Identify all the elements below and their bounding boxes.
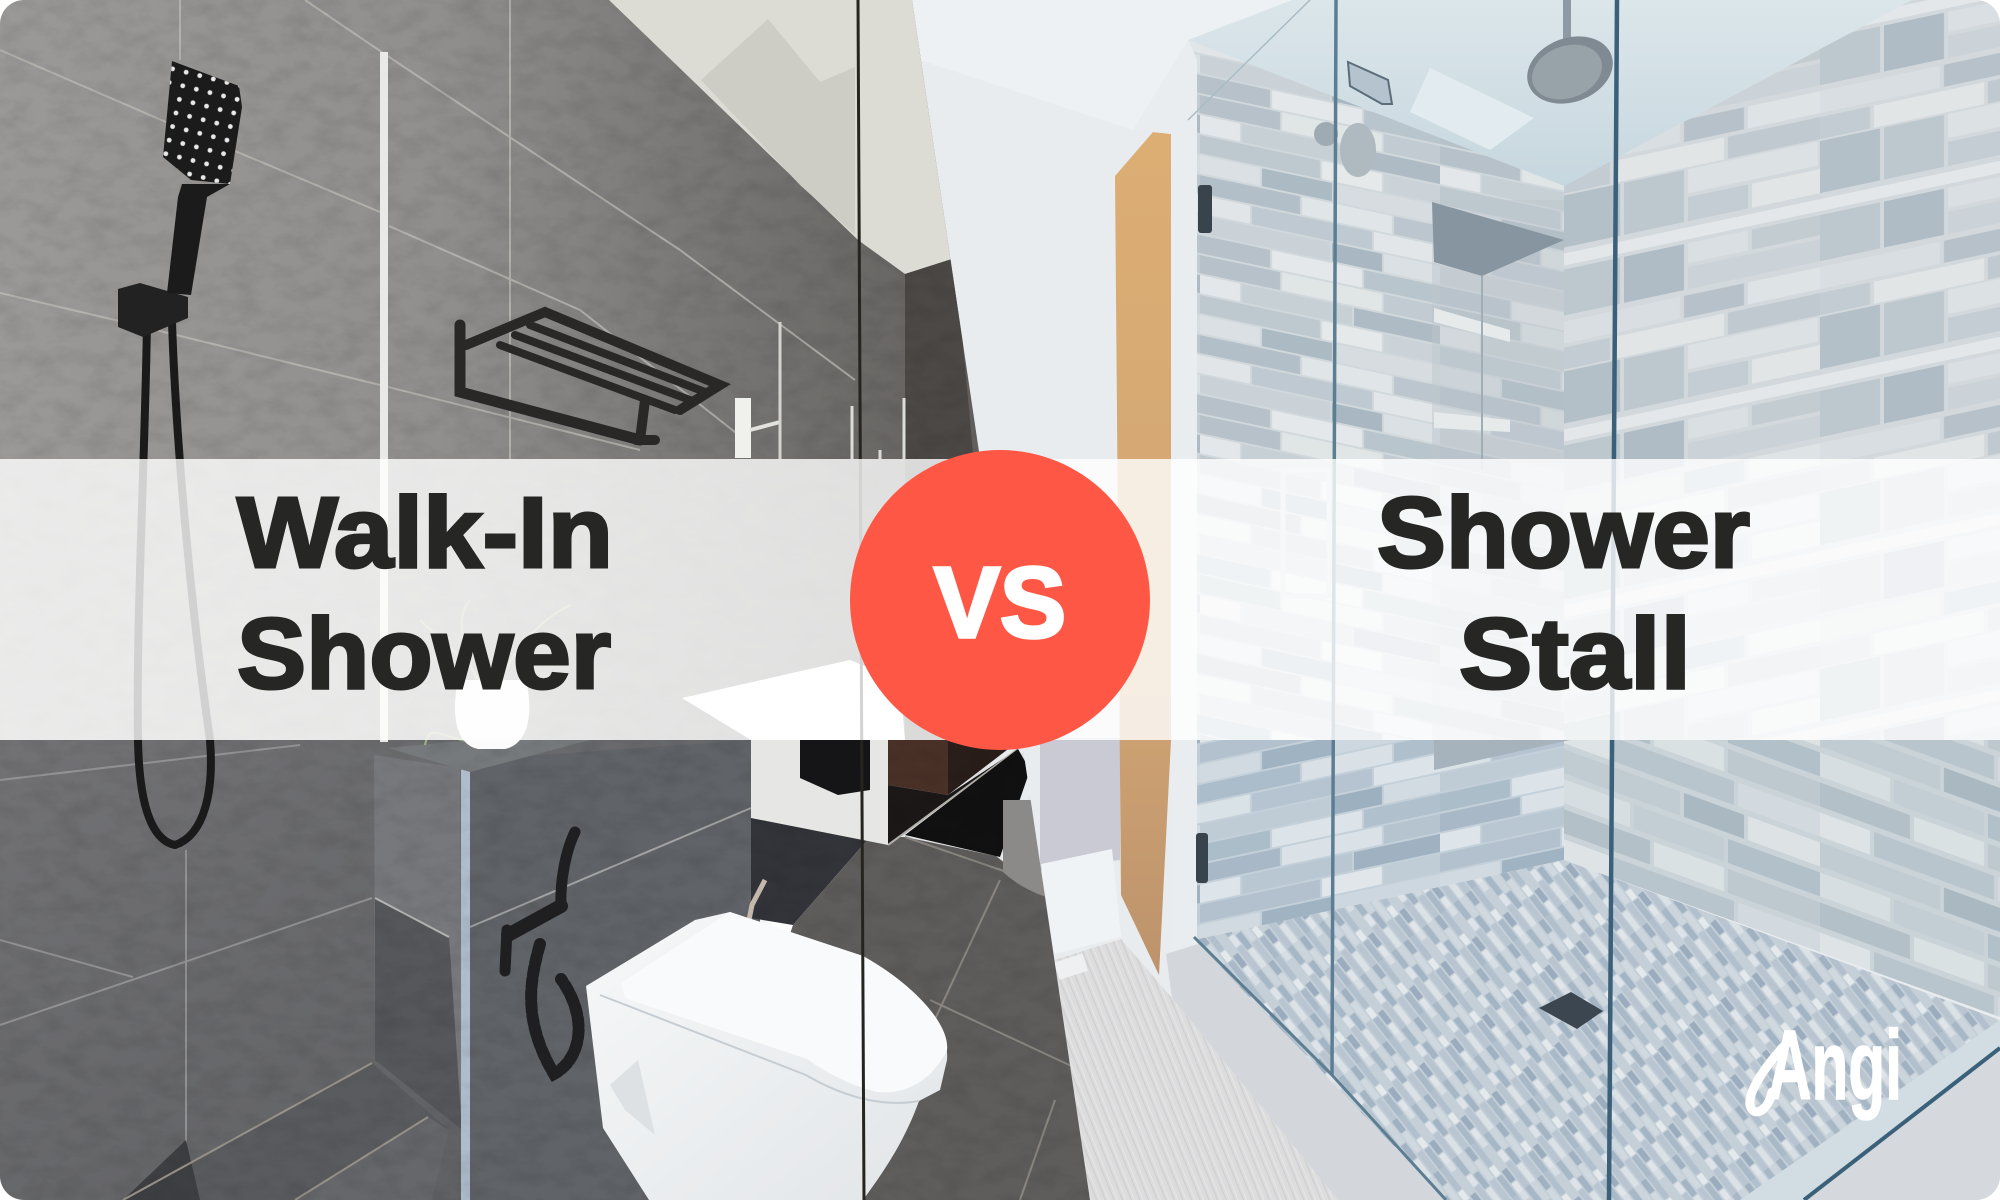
bidet sprayer <box>505 832 579 1074</box>
heading: Shower Stall: Shower <box>1377 477 1750 589</box>
stall ceiling <box>1188 0 1912 186</box>
plant <box>420 600 570 745</box>
vanity shadow <box>905 749 1030 857</box>
shower head <box>163 61 242 184</box>
VS badge: VS <box>934 547 1066 659</box>
stall right wall lower tiles <box>1564 740 2000 1017</box>
wall mount arm <box>1348 62 1392 104</box>
toilet lid <box>621 912 947 1093</box>
white wall trim <box>380 52 388 742</box>
door handle <box>1280 492 1332 520</box>
bathroom vanity cabinet <box>888 740 1020 845</box>
stall right wall tiles <box>1564 0 2000 740</box>
Angi logo: Angi <box>1768 1010 1902 1120</box>
panel: walk-in shower photo <box>0 0 1100 1200</box>
bin <box>1003 800 1046 897</box>
heading: Walk-In Shower: Walk-In <box>237 477 613 589</box>
bench step <box>123 1063 449 1200</box>
wall tile soft highlight <box>1188 0 2000 1017</box>
wall-hung toilet <box>586 912 947 1200</box>
glass hinge top <box>1198 185 1212 233</box>
heading: Shower Stall <box>1377 477 1750 710</box>
toilet paper holder <box>800 740 870 795</box>
marble curb right <box>1804 1048 2000 1200</box>
black tile wall behind toilet <box>751 818 870 925</box>
tiled pier <box>374 740 751 1200</box>
bathroom striped floor <box>1054 939 1338 1200</box>
glass panel edges <box>1188 0 2000 1200</box>
overhead rain shower head <box>1527 0 1613 104</box>
Angi logo <box>1750 1010 1902 1120</box>
wall joints lower <box>0 745 372 1150</box>
floor <box>790 837 1090 1200</box>
stall back wall tiles <box>1188 40 1564 740</box>
toilet faucet <box>748 880 765 925</box>
stone grain texture <box>0 0 1100 1200</box>
towel rack <box>460 312 720 440</box>
panel: shower stall photo <box>880 0 2000 1200</box>
wood cabinet <box>1115 132 1171 975</box>
shower handle <box>167 184 230 295</box>
glass door edge <box>858 0 864 1200</box>
glass door handle <box>852 398 904 459</box>
inner floor edge strip <box>1740 1020 2000 1200</box>
ceiling reflection <box>701 19 855 235</box>
hand shower <box>118 61 242 845</box>
marble curb left <box>1166 944 1446 1200</box>
white marble sink block <box>751 740 888 845</box>
heading: Walk-In Shower <box>237 477 613 710</box>
heading: Walk-In Shower: Shower <box>237 598 611 710</box>
floor drain <box>1539 992 1603 1029</box>
wall door hinge <box>735 322 780 459</box>
lower wall tiles <box>0 740 760 1200</box>
shower niche <box>1432 200 1570 770</box>
shower hose <box>138 322 211 845</box>
ceiling vent <box>1410 68 1534 150</box>
VS badge <box>850 450 1150 750</box>
glass hinge bottom <box>1196 833 1208 883</box>
stall back wall lower tiles <box>1188 740 1564 940</box>
upper tile joints <box>0 0 855 459</box>
floor vent <box>1054 953 1088 980</box>
shower wall bracket <box>118 283 188 337</box>
side shower head <box>1314 122 1376 177</box>
heading: Shower Stall: Stall <box>1459 598 1691 710</box>
right corner dark wall <box>905 260 973 459</box>
stall mosaic floor <box>1194 860 2000 1200</box>
countertop reflection <box>682 660 905 740</box>
toilet base <box>586 912 947 1200</box>
upper wall tiles <box>0 0 979 740</box>
wall and ceiling behind stall <box>901 0 2000 1020</box>
white vase <box>455 680 529 749</box>
ceiling <box>609 0 955 274</box>
title band <box>0 459 2000 740</box>
white wall pillar <box>1153 50 1197 943</box>
floor joints <box>905 837 1080 1200</box>
